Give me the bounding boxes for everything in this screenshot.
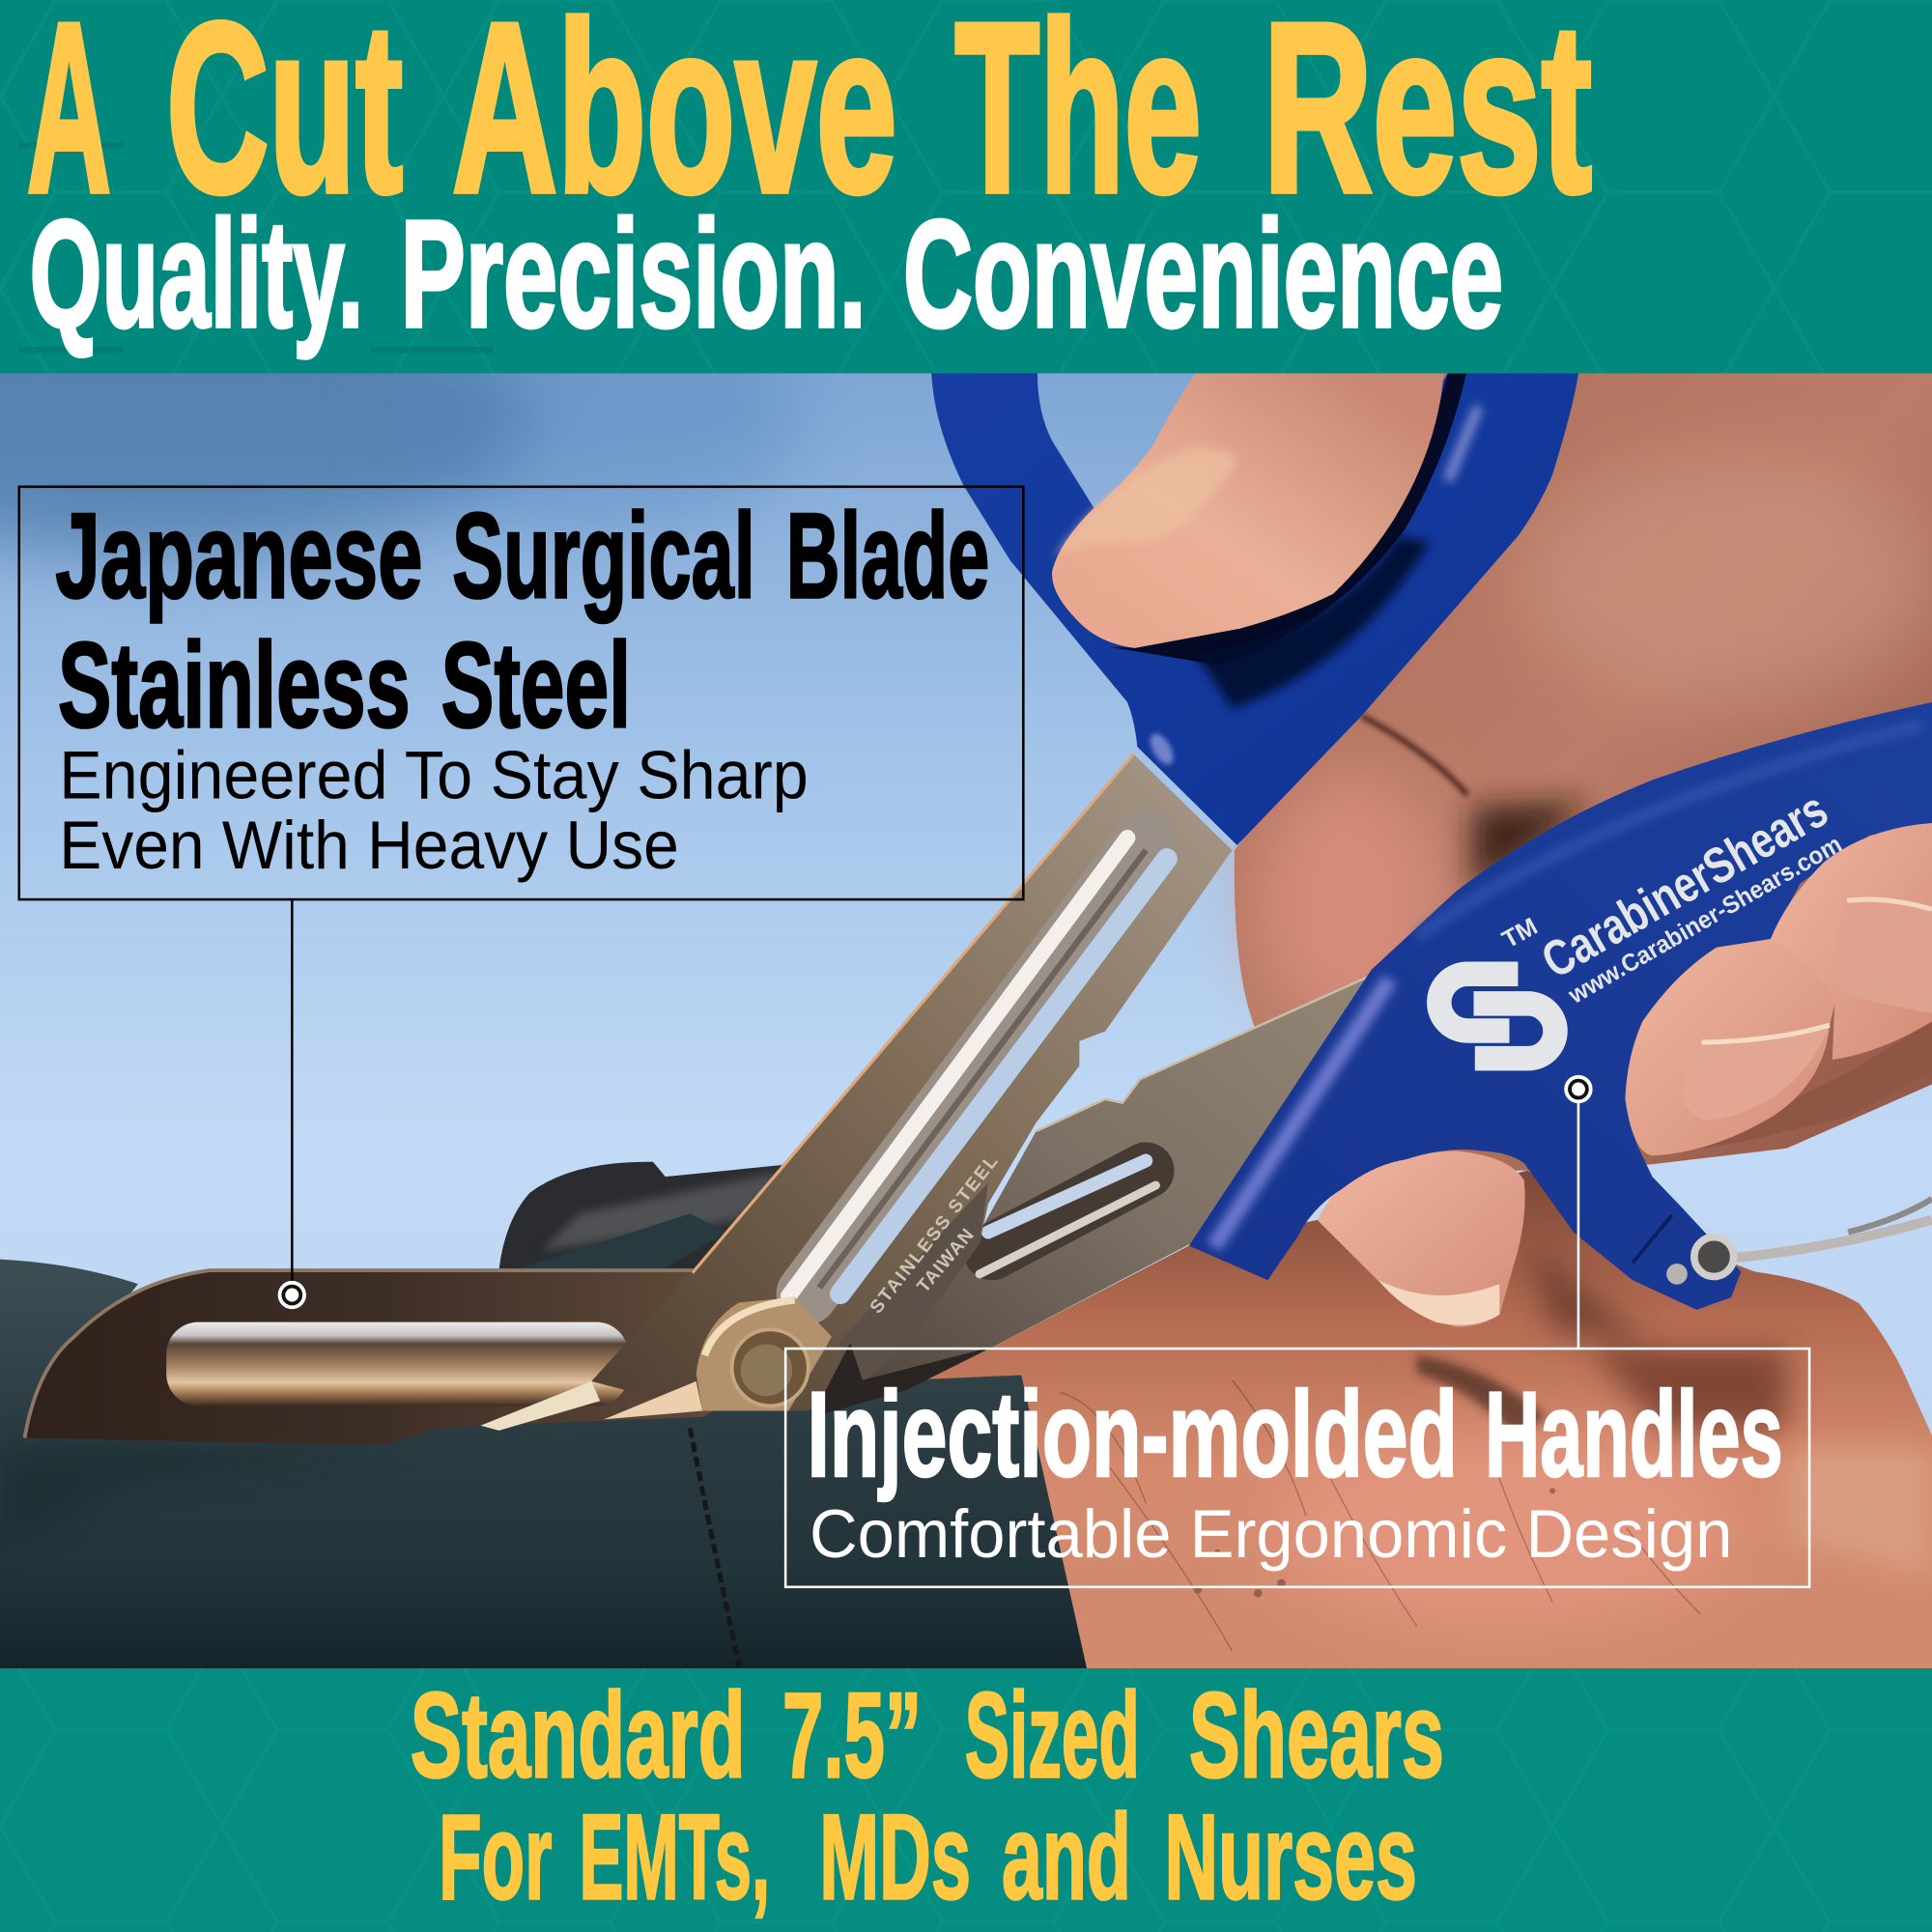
brand text on handle: www.Carabiner-Shears.com — [1563, 831, 1846, 1009]
shank engraving: TAIWAN — [914, 1225, 979, 1296]
footer band — [0, 1668, 1932, 1932]
logo: CS mark — [1439, 974, 1555, 1059]
left blade and spine — [25, 754, 1233, 1445]
header band — [0, 0, 1932, 373]
shank engraved strip — [838, 1182, 988, 1392]
footer text: Shears — [1189, 1668, 1444, 1803]
title — [27, 0, 1592, 242]
back hand — [1195, 373, 1932, 1171]
footer text: EMTs, — [579, 1791, 770, 1925]
callout body: Even With Heavy Use — [59, 807, 679, 883]
brand text on handle: TM — [1498, 913, 1542, 953]
fingers on lower handle — [1625, 823, 1932, 1155]
shank slot rim — [807, 840, 1146, 1293]
lower blue handle — [1189, 702, 1932, 1310]
shank — [591, 754, 1233, 1410]
callout heading: Japanese — [55, 490, 422, 624]
upper blue handle — [931, 373, 1578, 845]
fuzzy velcro and button — [499, 1162, 788, 1282]
callout heading: Steel — [441, 619, 631, 753]
callout heading: Injection-molded — [807, 1368, 1458, 1502]
middle finger — [1625, 939, 1834, 1155]
footer text: For — [439, 1791, 552, 1925]
right blade — [838, 976, 1370, 1405]
sky background — [0, 283, 1932, 1668]
subtitle — [30, 188, 1503, 359]
callout body: Engineered To Stay Sharp — [59, 737, 809, 813]
serrated cut edge — [480, 1381, 600, 1431]
upper right finger — [1771, 823, 1932, 1060]
dark gap above handle box — [813, 1343, 993, 1417]
callout frame — [19, 487, 1023, 899]
brand text on handle — [1498, 781, 1846, 1009]
fabric sleeve — [0, 1213, 1087, 1668]
hairs and specks — [1060, 1380, 1700, 1651]
carabiner ring and wire — [1666, 1199, 1932, 1285]
finger shadow — [1652, 1021, 1932, 1155]
thumb on upper handle — [1052, 373, 1444, 648]
callout heading: Blade — [786, 490, 989, 624]
footer text: Standard — [411, 1668, 746, 1803]
callout body: Comfortable Ergonomic Design — [810, 1495, 1732, 1572]
right blade slot — [992, 1171, 1146, 1252]
footer text — [411, 1668, 1444, 1925]
thumb under lower handle — [1318, 1151, 1525, 1327]
subtitle: Quality. — [30, 188, 363, 359]
callout heading: Surgical — [452, 490, 755, 624]
subtitle: Precision. — [401, 188, 867, 359]
footer text: Nurses — [1164, 1791, 1417, 1925]
callout heading: Stainless — [58, 619, 411, 753]
hair shadow spot — [1417, 1355, 1547, 1435]
footer text: and — [1002, 1791, 1131, 1925]
callout frame — [785, 1349, 1809, 1587]
footer text: MDs — [819, 1791, 971, 1925]
callout: injection-molded handles — [785, 1349, 1809, 1587]
blade slot long — [166, 1322, 629, 1406]
subtitle: Convenience — [903, 188, 1503, 359]
lower hand and wrist — [907, 1171, 1932, 1668]
footer text: 7.5” — [782, 1668, 922, 1803]
callout: Japanese surgical blade — [19, 487, 1023, 899]
brand text on handle: CarabinerShears — [1533, 781, 1837, 989]
photo: scissors cutting fabric — [0, 283, 1932, 1668]
callout heading — [55, 490, 989, 753]
leader line to handle — [1566, 1077, 1591, 1348]
pivot screw — [696, 1297, 832, 1410]
callout body — [59, 737, 809, 883]
leader line to blade — [280, 899, 304, 1307]
blade: flat cutting jaw — [25, 1270, 813, 1445]
footer text: Sized — [965, 1668, 1140, 1803]
shank engraving: STAINLESS STEEL — [867, 1151, 1003, 1318]
